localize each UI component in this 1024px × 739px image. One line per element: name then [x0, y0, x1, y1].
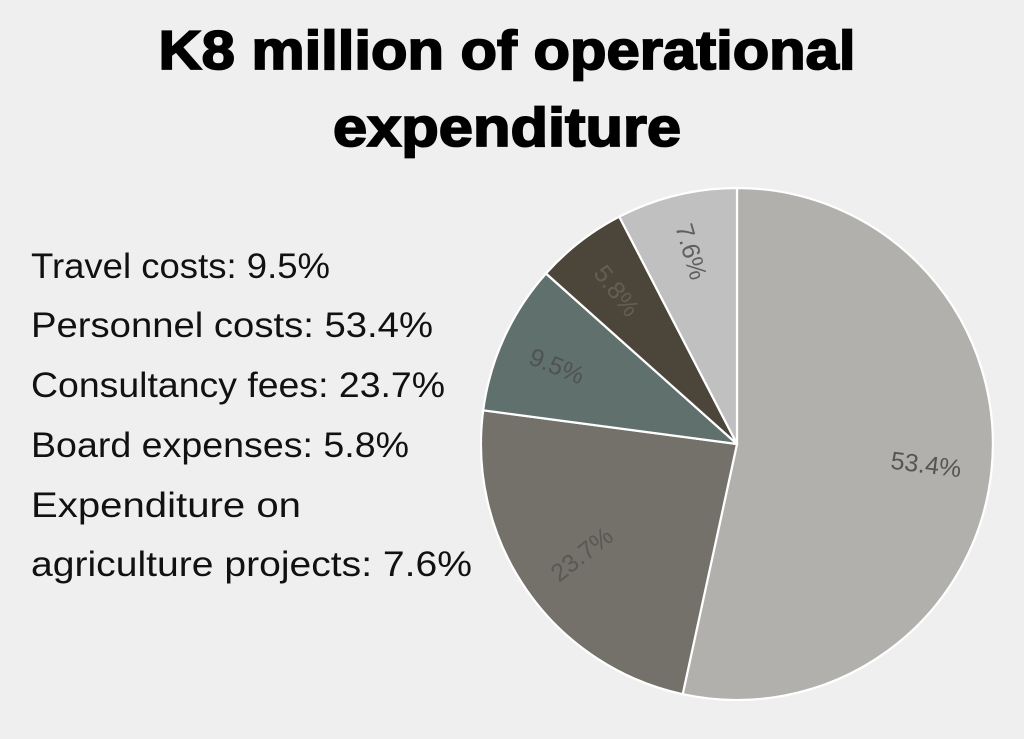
title: expenditure: [333, 96, 681, 158]
pie value labels: 23.7%: [546, 522, 619, 588]
pie value labels: 7.6%: [669, 221, 712, 283]
pie value labels: [525, 221, 963, 588]
title: K8 million of operational: [158, 19, 856, 81]
legend text block: Travel costs: 9.5%: [31, 247, 330, 286]
legend text block: [31, 247, 472, 584]
pie value labels: 5.8%: [588, 260, 645, 322]
legend text block: Expenditure on: [31, 486, 301, 525]
legend text block: Personnel costs: 53.4%: [31, 306, 433, 345]
legend text block: Consultancy fees: 23.7%: [31, 366, 445, 405]
legend text block: agriculture projects: 7.6%: [31, 545, 472, 584]
pie value labels: 9.5%: [525, 343, 588, 390]
legend text block: Board expenses: 5.8%: [31, 426, 409, 465]
pie value labels: 53.4%: [889, 447, 963, 483]
title: [158, 19, 856, 158]
slice: travel costs 9.5%: [483, 274, 737, 444]
slice: agriculture projects 7.6%: [619, 188, 737, 444]
slice: consultancy fees 23.7%: [481, 410, 737, 694]
pie chart: [481, 188, 993, 700]
slice: personnel costs 53.4%: [683, 188, 993, 700]
slice: board expenses 5.8%: [546, 217, 737, 444]
